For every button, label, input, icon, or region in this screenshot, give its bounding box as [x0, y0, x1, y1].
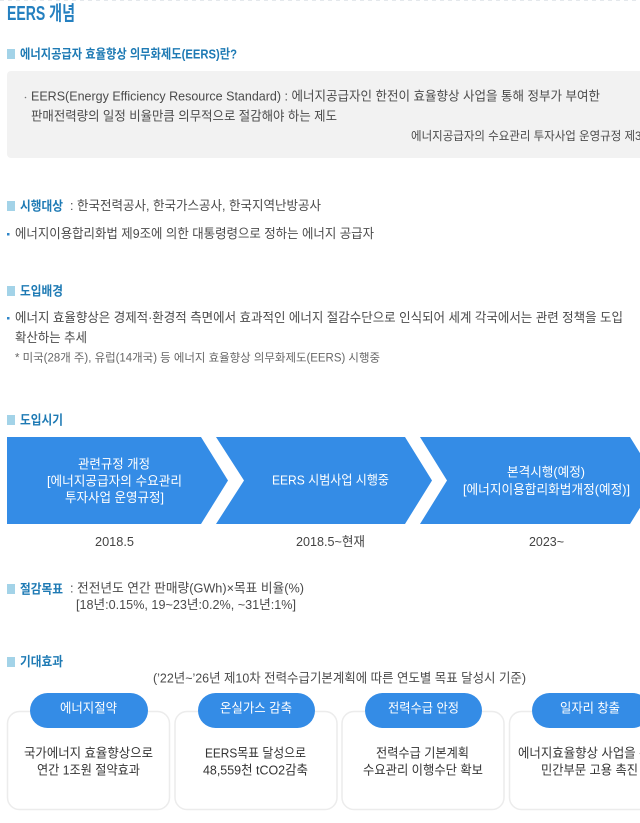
card: power supply: 수요관리 이행수단 확보 [363, 762, 483, 778]
section: target: : 한국전력공사, 한국가스공사, 한국지역난방공사 [70, 198, 321, 213]
chevron: step 2: EERS 시범사업 시행중 [272, 472, 389, 488]
section: savings target: : 전전년도 연간 판매량(GWh)×목표 비율(%) [70, 580, 304, 596]
timeline dates: 2018.5~현재 [296, 534, 365, 549]
panel: definition box: 판매전력량의 일정 비율만큼 의무적으로 절감해야 하는 제도 [31, 108, 337, 124]
timeline dates [95, 534, 564, 549]
effects basis note: (’22년~’26년 제10차 전력수급기본계획에 따른 연도별 목표 달성시 기준) [153, 670, 526, 686]
card: power supply: 전력수급 안정 [388, 700, 459, 716]
card: greenhouse gas: 온실가스 감축 [220, 700, 292, 716]
card: energy saving: 에너지절약 [60, 700, 117, 716]
section: background: * 미국(28개 주), 유럽(14개국) 등 에너지 효율향상 의무화제도(EERS) 시행중 [15, 350, 380, 364]
section: background: 도입배경 [20, 284, 63, 298]
timeline chevrons [7, 437, 640, 524]
section: target [7, 198, 374, 241]
section: savings target: [18년:0.15%, 19~23년:0.2%, ~31년:1%] [76, 597, 296, 612]
card: greenhouse gas: EERS목표 달성으로 [205, 746, 306, 760]
card: energy saving [8, 693, 170, 810]
card: power supply [342, 693, 504, 810]
section: savings target: 절감목표 [20, 582, 63, 596]
card: greenhouse gas: 48,559천 tCO2감축 [203, 762, 308, 778]
section: background: 에너지 효율향상은 경제적·환경적 측면에서 효과적인 에너지 절감수단으로 인식되어 세계 각국에서는 관련 정책을 도입 [15, 310, 623, 325]
heading: EERS definition: 에너지공급자 효율향상 의무화제도(EERS)란? [20, 46, 237, 62]
section: target: 시행대상 [20, 198, 63, 214]
panel: definition box [7, 71, 640, 158]
section: savings target [7, 580, 304, 612]
panel: definition box: EERS(Energy Efficiency Resource Standard) : 에너지공급자인 한전이 효율향상 사업을 통해 정부가 부여한 [31, 88, 600, 104]
card: job creation [510, 693, 640, 810]
card: energy saving: 연간 1조원 절약효과 [37, 762, 140, 778]
timeline dates: 2018.5 [95, 534, 134, 549]
card: power supply: 전력수급 기본계획 [376, 746, 469, 760]
card: greenhouse gas [175, 693, 337, 810]
timeline dates: 2023~ [529, 534, 564, 549]
card: energy saving: 국가에너지 효율향상으로 [24, 746, 153, 760]
heading: timeline: 도입시기 [20, 412, 63, 428]
card: job creation: 일자리 창출 [560, 700, 620, 716]
section: background: 확산하는 추세 [15, 330, 87, 345]
chevron: step 1 [7, 437, 228, 524]
chevron: step 1: 관련규정 개정 [78, 456, 150, 472]
heading: expected effects: 기대효과 [20, 654, 63, 669]
chevron: step 2 [216, 437, 432, 524]
section: background [7, 284, 623, 364]
chevron: step 3: 본격시행(예정) [507, 464, 585, 480]
chevron: step 1: [에너지공급자의 수요관리 [47, 474, 182, 488]
title: EERS 개념 [7, 2, 75, 25]
chevron: step 3: [에너지이용합리화법개정(예정)] [463, 482, 630, 497]
chevron: step 1: 투자사업 운영규정] [65, 490, 164, 505]
chevron: step 3 [420, 437, 640, 524]
section: target: 에너지이용합리화법 제9조에 의한 대통령령으로 정하는 에너지 공급자 [15, 226, 374, 241]
